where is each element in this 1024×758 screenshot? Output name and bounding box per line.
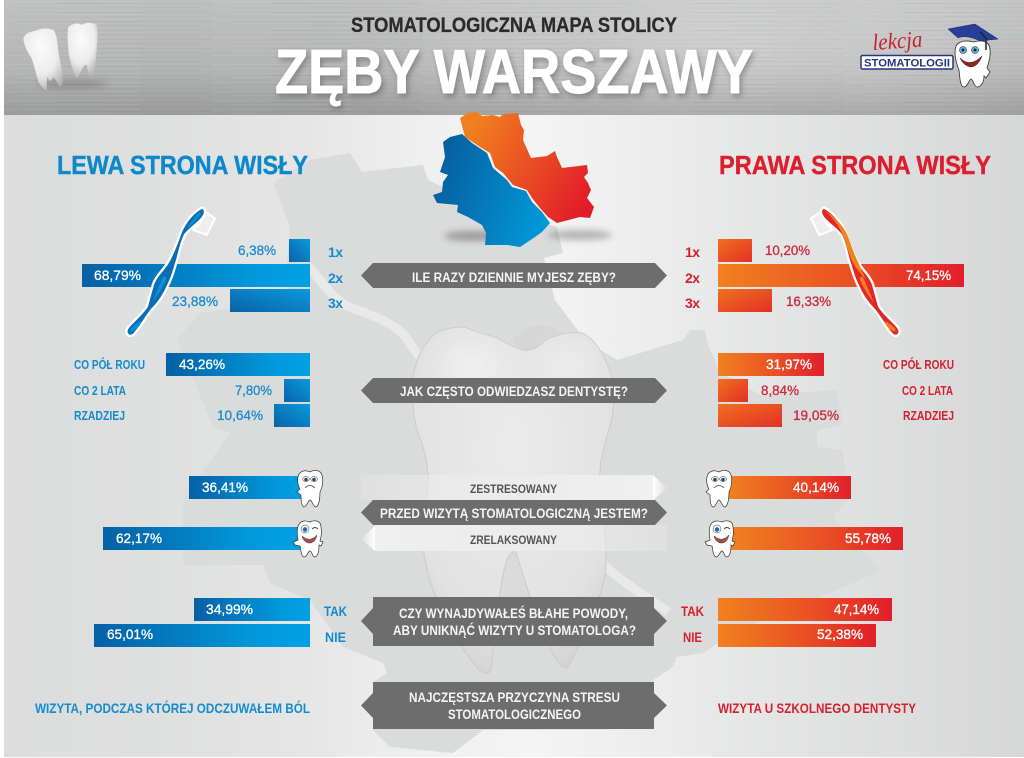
map: left bank — [433, 134, 550, 247]
chart: brushing frequency left: 3x — [328, 295, 343, 311]
chart: excuses left: NIE — [325, 629, 346, 645]
chart: excuses left — [94, 598, 347, 647]
chart: dentist visits left: CO PÓŁ ROKU — [74, 357, 145, 372]
question banner: stress cause: NAJCZĘSTSZA PRZYCZYNA STRESU — [409, 690, 620, 705]
chart: dentist visits left: 43,26% — [179, 356, 225, 372]
chart: dentist visits left: RZADZIEJ — [74, 409, 125, 423]
chart: excuses right: TAK — [681, 603, 704, 619]
chart: brushing frequency right: 16,33% — [786, 293, 831, 309]
question banner: stress cause: STOMATOLOGICZNEGO — [448, 707, 581, 722]
chart: dentist visits left: 10,64% — [217, 407, 263, 423]
question banner: excuses — [361, 597, 667, 646]
icon: red toothbrush — [811, 208, 900, 336]
question banner: visits — [361, 378, 667, 403]
question banner: excuses: CZY WYNAJDYWAŁEŚ BŁAHE POWODY, — [399, 606, 628, 621]
question banner: stress cause — [361, 682, 667, 729]
chart: excuses left: TAK — [324, 603, 347, 619]
header band — [4, 0, 1024, 115]
background map of Warsaw — [177, 153, 880, 753]
question banner: mood — [361, 500, 667, 525]
subtitle: STOMATOLOGICZNA MAPA STOLICY — [351, 14, 677, 37]
chart: dentist visits right: 19,05% — [793, 407, 839, 423]
light banner: relaxed — [361, 525, 667, 551]
icon: blue toothbrush — [126, 208, 215, 336]
chart: dentist visits right: CO PÓŁ ROKU — [883, 357, 954, 372]
chart: excuses right — [681, 598, 892, 647]
logo: lekcja stomatologii: lekcja — [872, 27, 923, 55]
chart: mood right — [728, 476, 903, 550]
chart: mood right: 40,14% — [793, 479, 839, 495]
chart: brushing frequency right: 3x — [685, 295, 700, 311]
map: left and right bank — [433, 112, 612, 247]
chart: brushing frequency left: 68,79% — [94, 267, 141, 283]
chart: brushing frequency right: 1x — [685, 244, 700, 260]
chart: mood right: 55,78% — [845, 530, 891, 546]
logo: lekcja stomatologii — [861, 24, 998, 87]
chart: brushing frequency right — [685, 239, 964, 312]
chart: dentist visits left: 7,80% — [235, 382, 272, 398]
chart: brushing frequency left: 2x — [328, 270, 343, 286]
chart: brushing frequency right: 2x — [685, 270, 700, 286]
question banner: visits: JAK CZĘSTO ODWIEDZASZ DENTYSTĘ? — [400, 384, 628, 399]
icon: stressed tooth left — [297, 470, 323, 507]
light banner: stressed: ZESTRESOWANY — [470, 482, 557, 496]
large background tooth — [413, 325, 614, 673]
chart: excuses right: 52,38% — [817, 626, 863, 642]
heading: left bank: LEWA STRONA WISŁY — [57, 152, 308, 180]
chart: brushing frequency right: 74,15% — [906, 267, 951, 283]
left answer: stress cause: WIZYTA, PODCZAS KTÓREJ ODCZUWAŁEM BÓL — [35, 699, 310, 716]
chart: mood left: 36,41% — [202, 479, 248, 495]
chart: dentist visits right: 8,84% — [761, 382, 799, 398]
chart: brushing frequency left: 6,38% — [238, 242, 276, 258]
chart: dentist visits left: CO 2 LATA — [74, 384, 126, 398]
chart: dentist visits left — [74, 353, 310, 427]
question banner: excuses: ABY UNIKNĄĆ WIZYTY U STOMATOLOGA? — [393, 623, 636, 638]
chart: excuses right: 47,14% — [834, 601, 879, 617]
chart: brushing frequency left: 23,88% — [172, 293, 218, 309]
question banner: brushing: ILE RAZY DZIENNIE MYJESZ ZĘBY? — [412, 270, 616, 285]
chart: dentist visits right: RZADZIEJ — [903, 409, 954, 423]
chart: mood left: 62,17% — [116, 530, 162, 546]
chart: mood left — [103, 476, 305, 550]
right answer: stress cause: WIZYTA U SZKOLNEGO DENTYSTY — [718, 700, 917, 716]
chart: dentist visits right: CO 2 LATA — [902, 384, 953, 398]
heading: right bank: PRAWA STRONA WISŁY — [719, 152, 991, 180]
light banner: stressed — [361, 475, 667, 500]
chart: dentist visits right: 31,97% — [766, 356, 812, 372]
chart: brushing frequency left — [82, 239, 343, 312]
logo: lekcja stomatologii: STOMATOLOGII — [864, 58, 950, 70]
chart: brushing frequency right: 10,20% — [765, 242, 810, 258]
icon: stressed tooth right — [706, 470, 732, 507]
icon: relaxed tooth right — [705, 521, 735, 557]
chart: brushing frequency left: 1x — [328, 244, 343, 260]
map: right bank — [460, 112, 594, 223]
chart: excuses left: 65,01% — [107, 626, 153, 642]
icon: two teeth — [23, 23, 108, 90]
light banner: relaxed: ZRELAKSOWANY — [470, 533, 557, 547]
chart: excuses left: 34,99% — [206, 601, 253, 617]
chart: dentist visits right — [718, 353, 954, 427]
chart: excuses right: NIE — [683, 629, 702, 645]
question banner: mood: PRZED WIZYTĄ STOMATOLOGICZNĄ JESTEM? — [380, 506, 648, 521]
question banner: brushing — [361, 263, 667, 288]
icon: relaxed tooth left — [293, 521, 323, 557]
title: ZĘBY WARSZAWY — [275, 38, 753, 107]
